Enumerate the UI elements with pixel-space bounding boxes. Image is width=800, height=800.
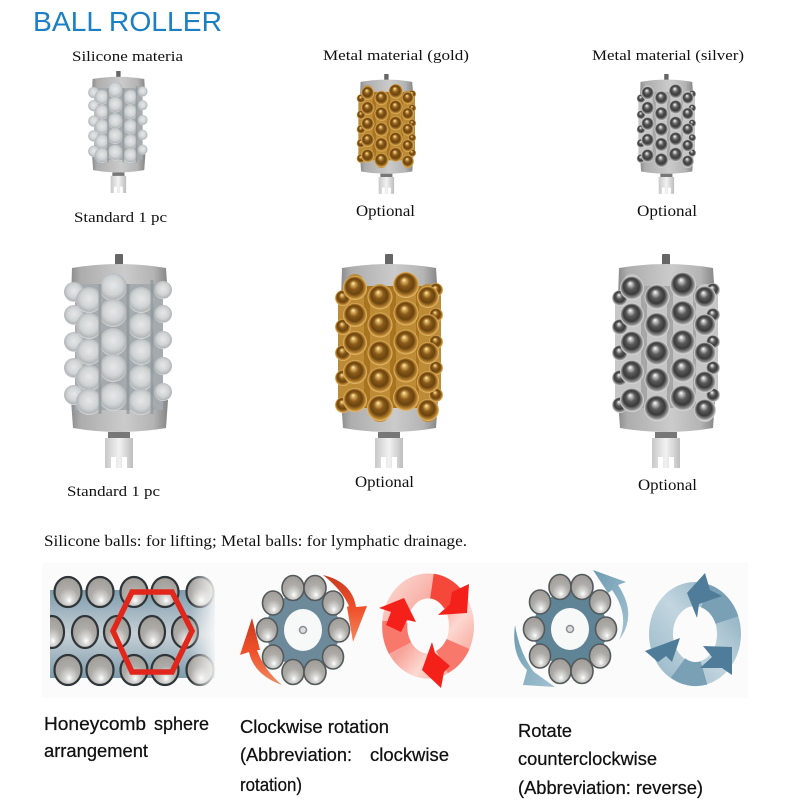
icon: clockwise gear [256,576,350,684]
icon: red rotation ring [379,584,469,688]
large gold roller [335,254,443,468]
text: clockwise [240,717,449,795]
usage note: Silicone balls: for lifting; Metal balls: for lymphatic drainage. [44,533,467,550]
text: counterclockwise [518,721,703,798]
caption: optional gold small: Optional [356,203,415,220]
text: counterclockwise: Rotate [518,721,572,741]
small gold roller [357,74,416,194]
panel: diagram strip [42,563,748,698]
label: metal material gold: Metal material (gold) [323,48,469,64]
text: counterclockwise: counterclockwise [518,749,657,769]
text: honeycomb: Honeycomb [44,714,146,734]
text: clockwise: (Abbreviation: [240,745,352,765]
text: clockwise: Clockwise rotation [240,717,389,737]
arrow: counterclockwise bottom [514,625,555,687]
text: clockwise: rotation) [240,775,302,795]
caption: optional silver large: Optional [638,477,697,494]
large silver roller [612,254,720,468]
text: counterclockwise: (Abbreviation: reverse) [518,778,703,798]
title: BALL ROLLER [33,6,222,37]
large silicone roller [64,254,172,468]
icon: honeycomb arrangement [50,576,215,686]
label: silicone material: Silicone materia [72,49,183,65]
arrow: clockwise right [323,575,367,642]
small silver roller [637,74,696,194]
caption: standard small: Standard 1 pc [74,210,167,226]
icon: blue rotation ring [645,573,732,675]
label: metal material silver: Metal material (silver) [592,48,744,64]
caption: standard large: Standard 1 pc [67,484,160,500]
arrow: counterclockwise top [593,570,628,640]
arrow: clockwise left [240,618,282,685]
text: honeycomb: sphere [154,714,209,734]
caption: optional silver small: Optional [637,203,697,220]
small silicone roller [88,71,148,193]
icon: counterclockwise gear [524,574,616,684]
text: clockwise: clockwise [370,745,449,765]
text: honeycomb [44,714,209,761]
text: honeycomb: arrangement [44,741,148,761]
caption: optional gold large: Optional [355,474,414,491]
